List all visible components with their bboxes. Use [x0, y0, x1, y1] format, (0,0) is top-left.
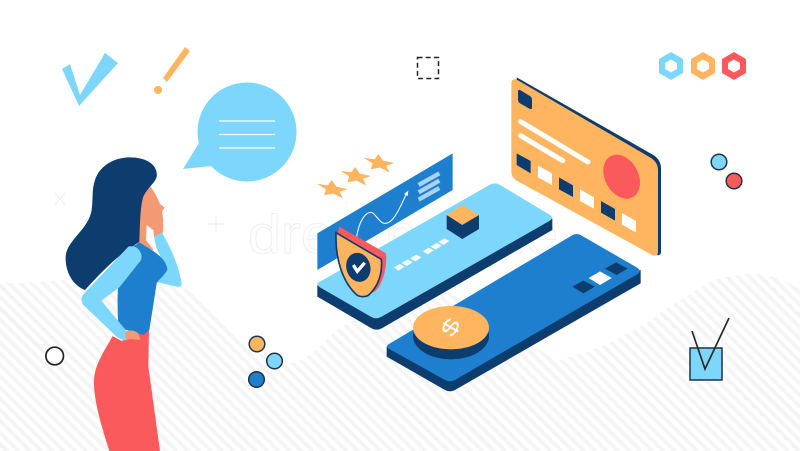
- woman figure: [66, 157, 182, 451]
- near arm: [82, 246, 142, 341]
- orange card: [511, 77, 661, 256]
- faint cross: [55, 193, 65, 205]
- shield: [336, 227, 386, 297]
- hand on hip: [125, 330, 140, 341]
- hexagon icons: [659, 52, 746, 80]
- red circle: [596, 148, 647, 205]
- decorative checkmark: [62, 53, 118, 106]
- cube: [447, 205, 479, 239]
- far arm: [154, 233, 182, 287]
- exclamation mark: [154, 47, 190, 94]
- card text lines: [521, 122, 588, 162]
- watermark: dreamstime: [248, 203, 558, 265]
- checkbox icon: [690, 318, 729, 380]
- light blue card: [317, 183, 552, 330]
- faint plus: [208, 216, 224, 232]
- skirt: [94, 329, 160, 451]
- dark blue card: [387, 234, 641, 391]
- stars: [316, 151, 395, 199]
- card number squares: [517, 153, 531, 173]
- chart line: [357, 192, 407, 237]
- coin: $: [436, 314, 465, 341]
- coin: [413, 306, 489, 359]
- card buttons: [572, 281, 595, 293]
- card dashes: [394, 238, 449, 271]
- face and neck: [137, 185, 165, 251]
- hair: [66, 157, 157, 290]
- speech bubble: [183, 82, 296, 182]
- dashed square: [418, 58, 438, 78]
- striped background wave: [0, 274, 800, 451]
- two dots right: [711, 154, 742, 189]
- torso: [118, 242, 167, 335]
- chip: [518, 90, 532, 109]
- panel lines: [419, 173, 439, 200]
- blue chart panel: [317, 153, 453, 270]
- ring left: [46, 347, 64, 365]
- three dots: [249, 336, 282, 387]
- isometric illustration: [316, 77, 661, 391]
